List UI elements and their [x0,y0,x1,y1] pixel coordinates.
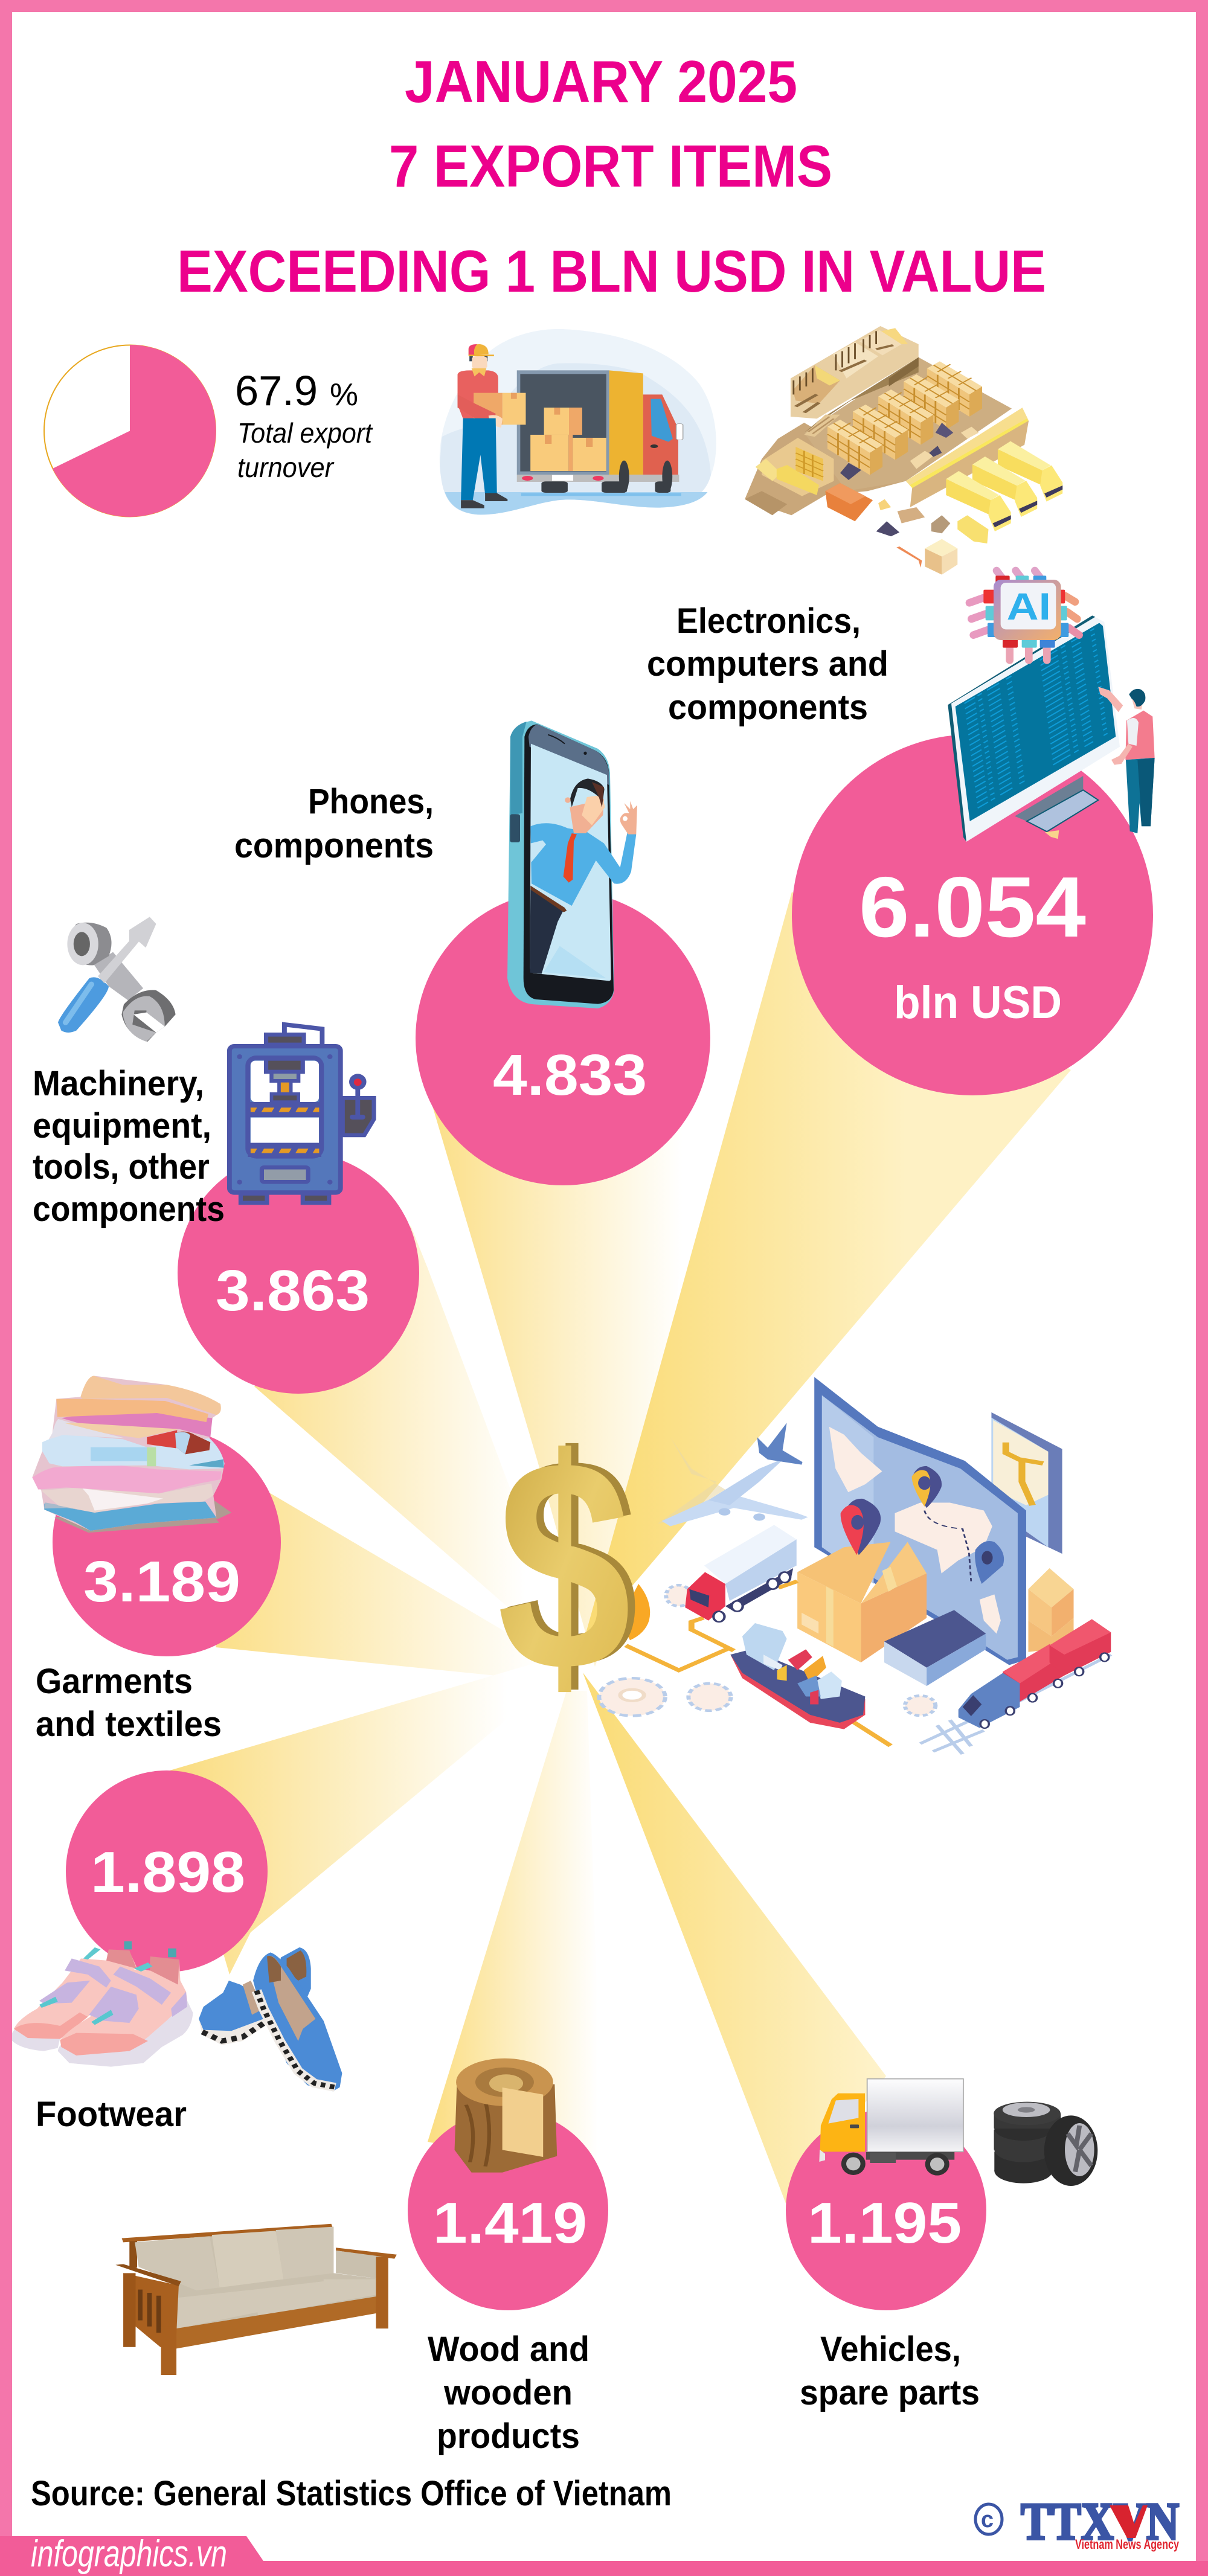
label: machinery: Machinery, [33,1064,204,1103]
pie chart: 67.9 percent share [44,345,216,517]
label: machinery [33,1064,225,1229]
unit: bln USD [894,977,1062,1028]
label: electronics: computers and [647,644,888,684]
ray to machinery [254,1226,532,1618]
label: garments: Garments [36,1662,193,1701]
truck [685,1525,797,1622]
label: electronics: Electronics, [676,601,861,641]
title line 2: 7 EXPORT ITEMS [389,133,832,199]
circle: machinery [178,1152,419,1394]
ray to wood [428,1691,604,2174]
number 6.054: 6.054 [859,859,1086,955]
caption text: turnover [237,452,335,483]
value: wood: 1.419 [433,2191,587,2255]
caption text: Total export [237,417,373,449]
value: electronics [859,859,1086,1028]
yellow pin [913,1466,942,1508]
pink sneakers [10,1941,193,2067]
illustration: isometric warehouse [745,326,1062,575]
parked yellow trucks [946,441,1062,543]
label: garments: and textiles [36,1705,222,1744]
yellow connecting pipes [626,1581,890,1746]
value: garments: 3.189 [83,1549,240,1614]
data circles [53,734,1153,2310]
label: phones: components [234,826,434,865]
label: wood [428,2330,590,2456]
illustration: tree stump and plank [455,2059,557,2173]
percent value: % [330,377,358,412]
title line 1: JANUARY 2025 [405,48,797,115]
circle: phones [416,891,710,1185]
label: wood: wooden [443,2373,573,2412]
label: electronics: components [668,688,868,727]
agency logo [975,2493,1180,2552]
container ship [730,1623,865,1729]
wordmark: TTXVN [1021,2493,1179,2551]
illustration: delivery truck [819,2079,963,2176]
person pointing at screen [1098,687,1155,833]
monitor screen [948,615,1120,842]
illustration: delivery man and truck [440,329,716,514]
circle: footwear [66,1770,268,1972]
illustration: gold dollar sign: $ [504,1394,638,1731]
label: phones [234,782,434,865]
orange crescent [620,1584,650,1640]
airplane [658,1423,808,1527]
pie caption [235,367,373,483]
illustration: smartphone with man [507,720,637,1008]
title [177,48,1046,304]
red pin [841,1499,881,1555]
value: phones: 4.833 [493,1043,647,1107]
label: wood: Wood and [428,2330,590,2369]
ray to garments [216,1493,556,1682]
illustration: stack of clothes [32,1376,231,1533]
source line: Source: General Statistics Office of Vietnam [31,2474,672,2513]
label: machinery: tools, other [33,1147,210,1187]
footer tab [0,2533,263,2576]
copyright mark: c [981,2507,994,2533]
copyright mark [975,2504,1002,2534]
illustration: monitor with AI chip and person [948,571,1155,842]
illustration: wooden sofa [115,2224,397,2375]
man in phone [530,778,637,974]
label: garments [36,1662,222,1744]
illustration: press machine icon [230,1025,374,1203]
label: wood: products [437,2417,580,2456]
label: phones: Phones, [308,782,434,821]
label: vehicles [800,2330,980,2412]
stacked boxes [1028,1568,1074,1652]
ray to phones [431,1102,697,1667]
ray to footwear [170,1661,556,1975]
circle: wood [408,2110,608,2310]
blue loafers [199,1947,342,2091]
delivery man [458,344,525,508]
label: machinery: equipment, [33,1106,211,1145]
yellow light rays [170,892,1071,2203]
illustration: footwear [10,1941,342,2091]
red swoosh of the logo V [1110,2505,1148,2538]
ray to electronics [583,892,1071,1642]
illustration: central logistics scene [599,1377,1111,1754]
label: footwear: Footwear [36,2095,187,2134]
label: machinery: components [33,1190,225,1229]
label: electronics [647,601,888,727]
percent value: 67.9 [235,367,318,414]
ray to vehicles [583,1673,886,2203]
warehouse building [884,1610,986,1686]
circle: electronics [792,734,1153,1095]
percent value [235,367,358,414]
value: footwear: 1.898 [91,1840,245,1905]
world map [814,1377,1062,1665]
AI chip icon [969,571,1079,660]
storage racks [827,361,982,475]
value: machinery: 3.863 [216,1258,370,1323]
label: vehicles: Vehicles, [820,2330,961,2369]
label: vehicles: spare parts [800,2373,980,2412]
blue pin [975,1541,1004,1584]
illustration: stack of tyres [994,2102,1097,2186]
cargo box [797,1542,927,1662]
website: infographics.vn [31,2533,227,2575]
title line 3: EXCEEDING 1 BLN USD IN VALUE [177,238,1046,304]
circle: garments [53,1428,281,1656]
gears [599,1585,936,1716]
illustration: gold dollar sign: $ [497,1396,631,1734]
caption text [237,417,373,483]
AI label: AI [1007,586,1051,628]
value: vehicles: 1.195 [808,2191,962,2255]
illustration: wrench and screwdriver icon [58,917,176,1042]
train [920,1620,1111,1754]
circle: vehicles [786,2110,986,2310]
monitor stand [1015,776,1098,839]
